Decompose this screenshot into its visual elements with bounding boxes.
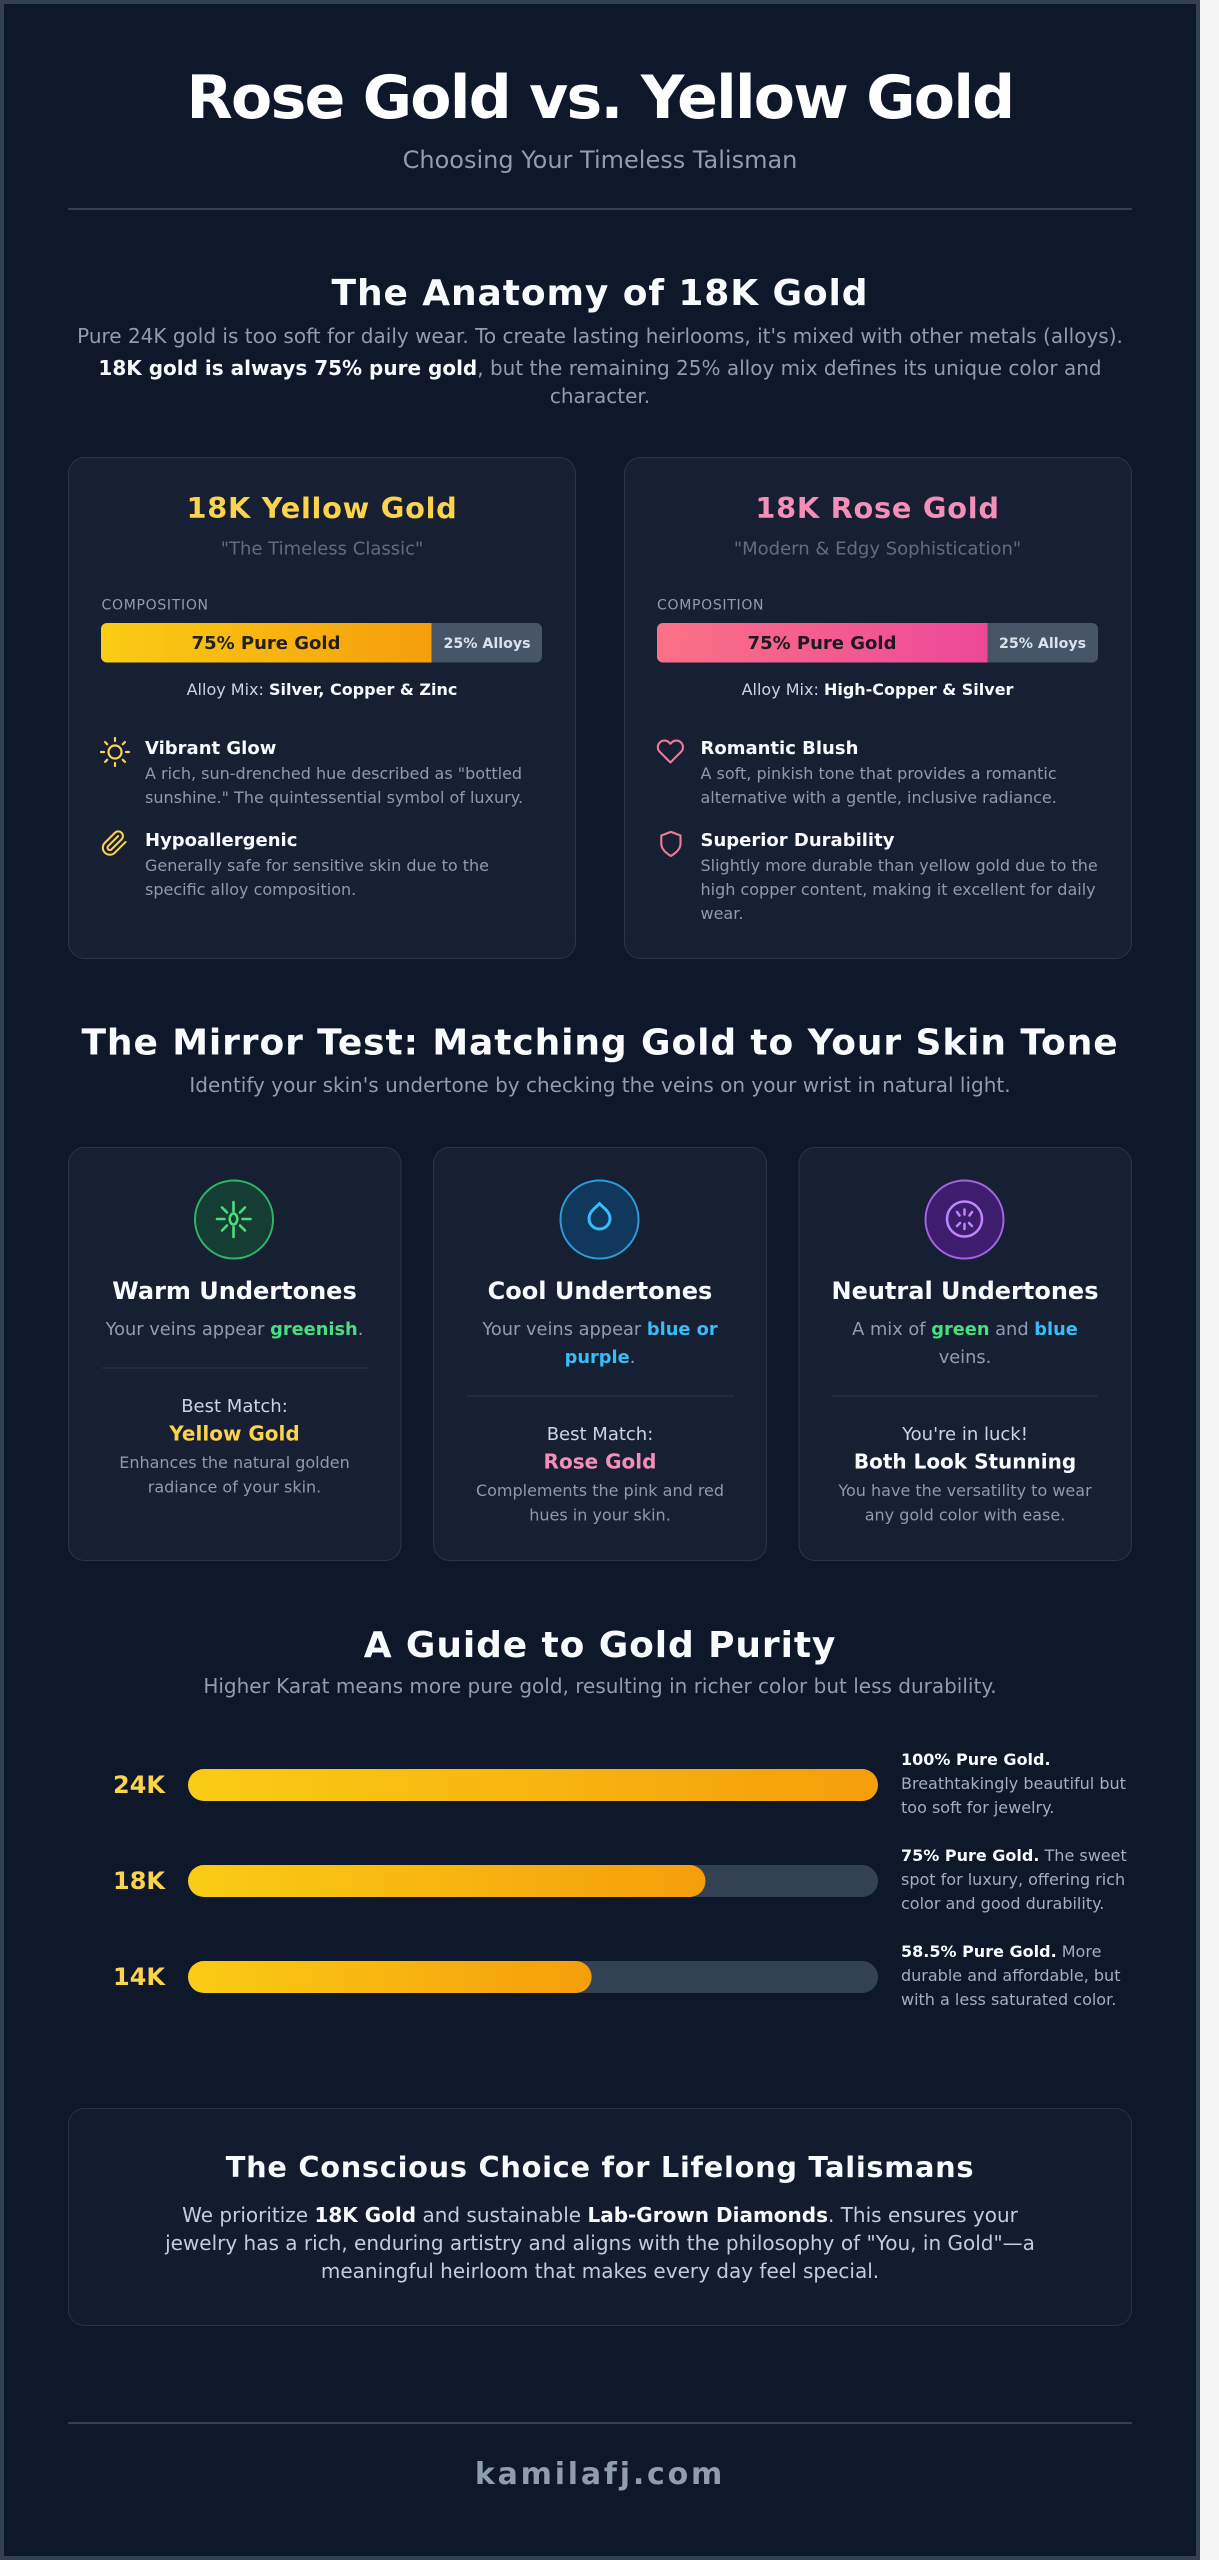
best match: radiance of your skin. bbox=[148, 1478, 321, 1496]
feature: vibrant glow bbox=[145, 738, 523, 807]
feature: hypoallergenic: specific alloy composition. bbox=[145, 880, 356, 899]
best match: You're in luck! bbox=[901, 1424, 1028, 1445]
purity row: 14K: 58.5% Pure Gold. More bbox=[901, 1942, 1101, 1961]
best match: Rose Gold bbox=[544, 1450, 656, 1474]
body text: We prioritize 18K Gold and sustainable Lab-Grown Diamonds. This ensures your bbox=[182, 2203, 1019, 2227]
purity row: 24K: Breathtakingly beautiful but bbox=[901, 1774, 1126, 1793]
alloy mix: Alloy Mix: High-Copper & Silver bbox=[742, 680, 1014, 699]
icon: green sun bbox=[195, 1180, 273, 1258]
intro text: Pure 24K gold is too soft for daily wear. To create lasting heirlooms, it's mixed with other metals (alloys). bbox=[77, 324, 1123, 348]
feature: hypoallergenic bbox=[145, 830, 489, 899]
purity row: 14K bbox=[113, 1942, 1120, 2009]
feature: superior durability bbox=[700, 830, 1098, 923]
vein description: Your veins appear greenish. bbox=[105, 1319, 363, 1340]
heading: Neutral Undertones bbox=[831, 1277, 1099, 1305]
best match: You have the versatility to wear bbox=[837, 1481, 1092, 1500]
feature: superior durability: Slightly more durable than yellow gold due to the bbox=[700, 856, 1098, 875]
panel: the conscious choice bbox=[68, 2108, 1132, 2326]
best match: hues in your skin. bbox=[529, 1506, 671, 1524]
composition bar: 75% Pure Gold bbox=[748, 633, 896, 654]
composition bar bbox=[101, 623, 542, 663]
composition bar bbox=[657, 623, 1098, 663]
composition label: COMPOSITION bbox=[657, 598, 764, 614]
header bbox=[187, 63, 1013, 174]
best match: Best Match: bbox=[547, 1424, 653, 1445]
vein description bbox=[852, 1319, 1078, 1368]
feature: romantic blush: alternative with a gentle, inclusive radiance. bbox=[700, 788, 1057, 807]
vein description: purple. bbox=[565, 1347, 635, 1368]
section heading: the mirror test: The Mirror Test: Matching Gold to Your Skin Tone bbox=[81, 1022, 1119, 1064]
feature: vibrant glow: Vibrant Glow bbox=[145, 738, 276, 759]
composition bar: 75% Pure Gold bbox=[192, 633, 340, 654]
section subtitle: Identify your skin's undertone by checking the veins on your wrist in natural light. bbox=[189, 1073, 1011, 1097]
panel: warm undertones bbox=[68, 1148, 401, 1560]
intro emphasis text bbox=[98, 356, 1102, 408]
vein description bbox=[481, 1319, 718, 1368]
title: Rose Gold vs. Yellow Gold bbox=[187, 63, 1013, 133]
best match: Complements the pink and red bbox=[476, 1481, 724, 1500]
purity row: 18K bbox=[113, 1846, 1127, 1913]
icon: heart bbox=[658, 741, 683, 762]
heading: Cool Undertones bbox=[488, 1277, 712, 1305]
feature: romantic blush: A soft, pinkish tone that provides a romantic bbox=[700, 764, 1057, 783]
feature: hypoallergenic: Hypoallergenic bbox=[145, 830, 297, 851]
purity row: 14K: 14K bbox=[113, 1963, 166, 1991]
panel: 18K yellow gold bbox=[68, 458, 576, 958]
vein description: A mix of green and blue bbox=[852, 1319, 1078, 1340]
icon: sun bbox=[101, 738, 129, 766]
purity row: 14K: durable and affordable, but bbox=[901, 1966, 1120, 1985]
feature: romantic blush: Romantic Blush bbox=[700, 738, 858, 759]
subtitle: Choosing Your Timeless Talisman bbox=[403, 146, 797, 174]
feature: superior durability: Superior Durability bbox=[700, 830, 895, 851]
best match bbox=[119, 1396, 350, 1496]
best match: Best Match: bbox=[181, 1396, 288, 1417]
intro emphasis text: 18K gold is always 75% pure gold, but the remaining 25% alloy mix defines its unique color and bbox=[98, 356, 1102, 380]
icon: shield bbox=[661, 832, 680, 856]
card title: 18K Yellow Gold bbox=[186, 491, 458, 525]
feature: vibrant glow: A rich, sun-drenched hue described as "bottled bbox=[145, 764, 522, 783]
purity row: 24K: 100% Pure Gold. bbox=[901, 1750, 1051, 1769]
best match: Enhances the natural golden bbox=[119, 1453, 350, 1472]
card title: 18K Rose Gold bbox=[755, 491, 1000, 525]
icon: neutral citrus bbox=[926, 1180, 1004, 1258]
best match: Yellow Gold bbox=[168, 1422, 300, 1446]
purity row: 24K: too soft for jewelry. bbox=[901, 1798, 1054, 1817]
section heading: guide to gold purity bbox=[203, 1625, 997, 1698]
purity row: 18K: spot for luxury, offering rich bbox=[901, 1870, 1125, 1889]
purity row: 14K: with a less saturated color. bbox=[901, 1990, 1116, 2009]
feature: superior durability: high copper content, making it excellent for daily bbox=[700, 880, 1096, 899]
feature: hypoallergenic: Generally safe for sensitive skin due to the bbox=[145, 856, 489, 875]
best match: Both Look Stunning bbox=[854, 1450, 1076, 1474]
body text: jewelry has a rich, enduring artistry and aligns with the philosophy of "You, in Gold"—a bbox=[164, 2231, 1035, 2255]
purity row: 24K: 24K bbox=[113, 1771, 166, 1799]
best match bbox=[837, 1424, 1092, 1524]
icon: paperclip bbox=[103, 831, 126, 855]
heading: The Conscious Choice for Lifelong Talismans bbox=[226, 2150, 974, 2184]
section heading: anatomy of 18K gold bbox=[77, 273, 1123, 348]
section heading: guide to gold purity: A Guide to Gold Purity bbox=[364, 1625, 836, 1666]
feature: vibrant glow: sunshine." The quintessential symbol of luxury. bbox=[145, 788, 523, 807]
footer brand: kamilafj.com bbox=[475, 2457, 725, 2492]
vein description: veins. bbox=[939, 1347, 991, 1368]
panel: neutral undertones bbox=[799, 1148, 1132, 1560]
body text bbox=[164, 2203, 1035, 2283]
purity row: 18K: 18K bbox=[113, 1867, 166, 1895]
heading: Warm Undertones bbox=[112, 1277, 357, 1305]
composition label: COMPOSITION bbox=[102, 598, 209, 614]
section heading: anatomy of 18K gold: The Anatomy of 18K Gold bbox=[332, 273, 868, 314]
section subtitle: Higher Karat means more pure gold, resulting in richer color but less durability. bbox=[203, 1674, 997, 1698]
vein description: Your veins appear blue or bbox=[481, 1319, 718, 1340]
composition bar: 25% Alloys bbox=[999, 636, 1086, 652]
purity row: 18K: color and good durability. bbox=[901, 1894, 1104, 1913]
section heading: the mirror test bbox=[81, 1022, 1119, 1097]
body text: meaningful heirloom that makes every day feel special. bbox=[321, 2259, 879, 2283]
feature: superior durability: wear. bbox=[700, 904, 743, 923]
panel: 18K rose gold bbox=[624, 458, 1132, 958]
composition bar: 25% Alloys bbox=[443, 636, 531, 652]
panel: cool undertones bbox=[434, 1148, 766, 1560]
purity row: 24K bbox=[113, 1750, 1126, 1817]
purity row: 18K: 75% Pure Gold. The sweet bbox=[901, 1846, 1127, 1865]
alloy mix: Alloy Mix: Silver, Copper & Zinc bbox=[187, 680, 457, 699]
card tagline: "The Timeless Classic" bbox=[221, 538, 423, 560]
intro emphasis text: character. bbox=[550, 384, 650, 408]
best match: any gold color with ease. bbox=[865, 1506, 1065, 1524]
card tagline: "Modern & Edgy Sophistication" bbox=[734, 538, 1021, 560]
best match bbox=[476, 1424, 724, 1524]
icon: water drop bbox=[560, 1180, 638, 1258]
feature: romantic blush bbox=[700, 738, 1057, 807]
